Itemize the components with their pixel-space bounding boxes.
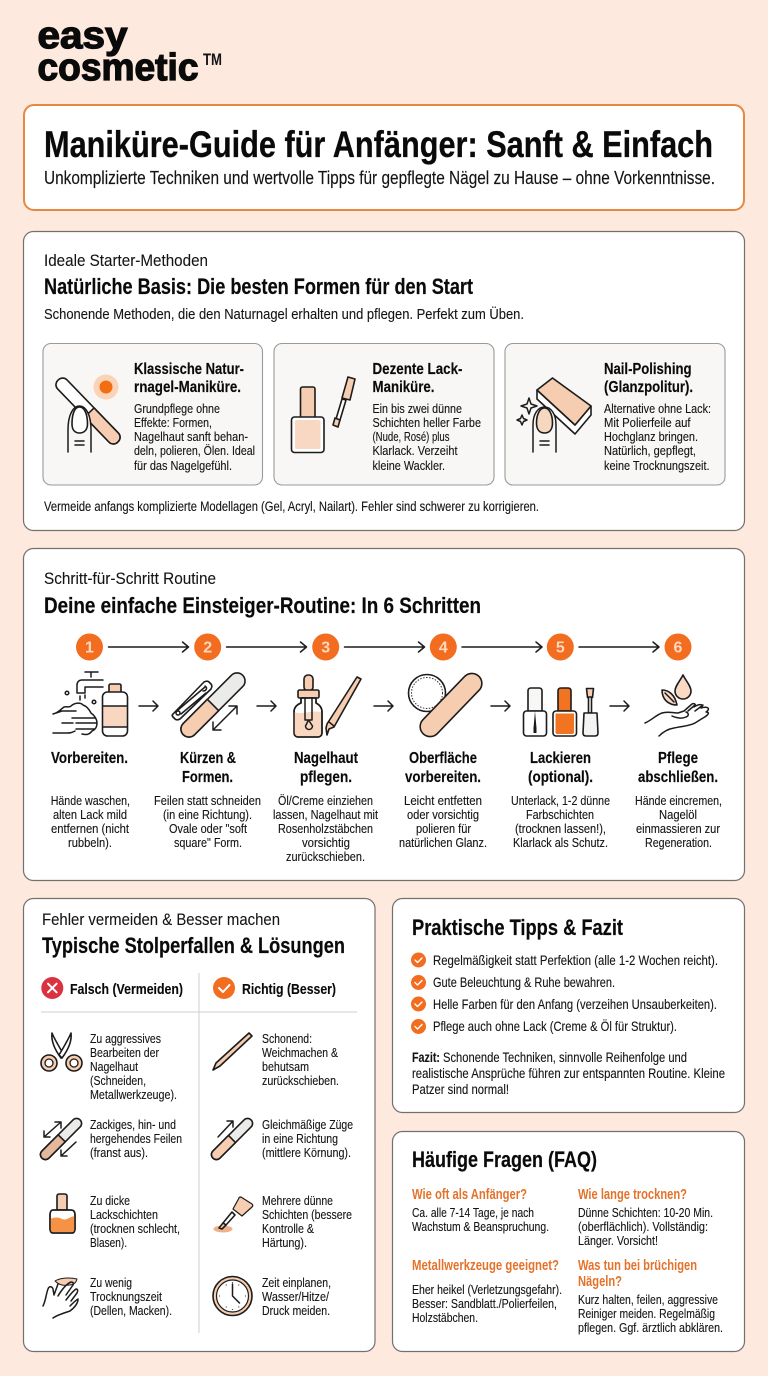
faq: brittle nails: Nägeln? bbox=[578, 1274, 622, 1290]
text: thick layers bbox=[90, 1193, 180, 1250]
text: plan time: Druck meiden. bbox=[262, 1303, 330, 1318]
icon: brush applying thin layer bbox=[214, 1197, 253, 1232]
step number timeline bbox=[76, 634, 692, 660]
faq: brittle nails: Was tun bei brüchigen bbox=[578, 1258, 697, 1274]
faq: metal tools bbox=[412, 1258, 562, 1325]
faq: how often: Ca. alle 7-14 Tage, je nach bbox=[412, 1205, 534, 1220]
icon: thick polish bottle bbox=[50, 1194, 75, 1233]
step 1 text: entfernen (nicht bbox=[51, 821, 129, 836]
text: aggressive cuticle: (Schneiden, bbox=[90, 1073, 146, 1088]
title panel bbox=[24, 105, 744, 210]
card title bbox=[604, 361, 693, 396]
column head: right: Richtig (Besser) bbox=[242, 981, 336, 998]
step 6 text: Regeneration. bbox=[645, 835, 712, 850]
step 6 text bbox=[635, 750, 722, 850]
text: plan time: Wasser/Hitze/ bbox=[262, 1289, 329, 1304]
step 5 text: Farbschichten bbox=[526, 807, 594, 822]
faq: how often: Wachstum & Beanspruchung. bbox=[412, 1219, 549, 1234]
faq: metal tools: Metallwerkzeuge geeignet? bbox=[412, 1258, 559, 1274]
conclusion: Fazit: bbox=[412, 1050, 440, 1065]
card title bbox=[372, 361, 462, 396]
step 3 text: zurückschieben. bbox=[286, 849, 365, 864]
card text: deln, polieren, Ölen. Ideal bbox=[134, 443, 255, 458]
column head: right bbox=[213, 977, 336, 999]
section heading: Typische Stolperfallen & Lösungen bbox=[42, 933, 345, 958]
icon: nail file and finger bbox=[53, 374, 123, 452]
card title: Maniküre. bbox=[372, 379, 434, 396]
faq: drying time: (oberflächlich). Vollständig: bbox=[578, 1219, 708, 1234]
icon: cuticle oil and stick bbox=[293, 675, 361, 737]
step 3 text: lassen, Nagelhaut mit bbox=[273, 807, 378, 822]
icon: cuticle stick bbox=[213, 1033, 252, 1070]
text: even strokes: in eine Richtung bbox=[262, 1131, 338, 1146]
step number timeline: 6 bbox=[674, 640, 683, 656]
step 2 text: (in eine Richtung). bbox=[163, 807, 252, 822]
faq: drying time bbox=[578, 1187, 713, 1248]
card text: keine Trocknungszeit. bbox=[604, 458, 710, 473]
card text: Effekte: Formen, bbox=[134, 415, 212, 430]
icon: hand with oil drop and leaf bbox=[645, 675, 708, 736]
section label: Ideale Starter-Methoden bbox=[44, 251, 208, 270]
step 3 text: Nagelhaut bbox=[294, 750, 359, 767]
step arrow bbox=[139, 701, 158, 711]
step 5 text: Unterlack, 1-2 dünne bbox=[511, 793, 610, 808]
card text bbox=[134, 401, 255, 473]
step 4 text bbox=[399, 750, 487, 850]
heading: Praktische Tipps & Fazit bbox=[412, 915, 623, 940]
card: subtle polish bbox=[274, 344, 494, 485]
column head: wrong: Falsch (Vermeiden) bbox=[70, 981, 183, 998]
icon: hand with smudged nail bbox=[43, 1278, 78, 1318]
step 1 text: rubbeln). bbox=[68, 835, 112, 850]
card text: Klarlack. Verzeiht bbox=[372, 443, 458, 458]
step 2 text: Ovale oder "soft bbox=[169, 821, 247, 836]
step number timeline: 4 bbox=[439, 640, 448, 656]
text: sawing filing: Zackiges, hin- und bbox=[90, 1117, 176, 1132]
faq: drying time: Wie lange trocknen? bbox=[578, 1187, 687, 1203]
faq: drying time: Länger. Vorsicht! bbox=[578, 1233, 658, 1248]
text: sawing filing bbox=[90, 1117, 182, 1160]
card text: (Nude, Rosé) plus bbox=[372, 429, 450, 444]
heading: Häufige Fragen (FAQ) bbox=[412, 1147, 597, 1172]
faq: brittle nails: Reiniger meiden. Regelmäßig bbox=[578, 1306, 715, 1321]
text: too little drying time: Trocknungszeit bbox=[90, 1289, 162, 1304]
faq: brittle nails: Kurz halten, feilen, aggressive bbox=[578, 1292, 718, 1307]
icon: clipper and nail file bbox=[172, 670, 248, 740]
step 4 text: polieren für bbox=[416, 821, 472, 836]
card title: Nail-Polishing bbox=[604, 361, 692, 378]
panel: practical tips bbox=[392, 898, 744, 1112]
step 5 text: Klarlack als Schutz. bbox=[513, 835, 608, 850]
step number timeline: 3 bbox=[321, 640, 330, 656]
step 1 text: Hände waschen, bbox=[51, 793, 130, 808]
step 4 text: natürlichen Glanz. bbox=[399, 835, 487, 850]
text: thin layers: Härtung). bbox=[262, 1235, 307, 1250]
card text: kleine Wackler. bbox=[372, 458, 445, 473]
icon: polish bottles bbox=[524, 688, 598, 736]
faq: metal tools: Holzstäbchen. bbox=[412, 1310, 478, 1325]
step 3 text bbox=[273, 750, 378, 864]
card text: Nagelhaut sanft behan- bbox=[134, 429, 248, 444]
text: aggressive cuticle: Metallwerkzeuge). bbox=[90, 1087, 177, 1102]
step 6 text: Nagelöl bbox=[659, 807, 697, 822]
card title bbox=[134, 361, 244, 396]
step number timeline: 1 bbox=[85, 640, 94, 656]
text: too little drying time bbox=[90, 1275, 172, 1318]
card text: Alternative ohne Lack: bbox=[604, 401, 711, 416]
faq: drying time: Dünne Schichten: 10-20 Min. bbox=[578, 1205, 713, 1220]
text: plan time: Zeit einplanen, bbox=[262, 1275, 331, 1290]
conclusion: Schonende Techniken, sinnvolle Reihenfolge und bbox=[443, 1050, 687, 1065]
step 2 text: Formen. bbox=[182, 769, 233, 786]
text: sawing filing: hergehendes Feilen bbox=[90, 1131, 182, 1146]
icon: washing hands bbox=[53, 672, 128, 736]
card text: Ein bis zwei dünne bbox=[372, 401, 462, 416]
logo bbox=[38, 15, 222, 89]
logo: cosmetic bbox=[38, 47, 198, 89]
text: gentle: Weichmachen & bbox=[262, 1045, 338, 1060]
text: too little drying time: Zu wenig bbox=[90, 1275, 132, 1290]
text: sawing filing: (franst aus). bbox=[90, 1145, 148, 1160]
text: gentle: zurückschieben. bbox=[262, 1073, 339, 1088]
text: plan time bbox=[262, 1275, 331, 1318]
text: aggressive cuticle: Bearbeiten der bbox=[90, 1045, 160, 1060]
icon: polish bottle and brush bbox=[292, 377, 355, 452]
step 3 text: vorsichtig bbox=[302, 835, 350, 850]
icon: one direction file bbox=[209, 1116, 255, 1162]
text: aggressive cuticle bbox=[90, 1031, 177, 1102]
faq: brittle nails bbox=[578, 1258, 723, 1335]
step number timeline: 2 bbox=[203, 640, 212, 656]
faq: metal tools: Besser: Sandblatt./Polierfeilen, bbox=[412, 1296, 557, 1311]
step 1 text: Vorbereiten. bbox=[51, 750, 128, 767]
text: thick layers: Lackschichten bbox=[90, 1207, 158, 1222]
card: classic manicure bbox=[43, 344, 262, 485]
step 4 text: Oberfläche bbox=[409, 750, 477, 767]
text: even strokes bbox=[262, 1117, 353, 1160]
text: even strokes: Gleichmäßige Züge bbox=[262, 1117, 353, 1132]
tip list: Gute Beleuchtung & Ruhe bewahren. bbox=[433, 974, 615, 990]
panel: common mistakes bbox=[24, 898, 375, 1352]
faq: metal tools: Eher heikel (Verletzungsgefahr). bbox=[412, 1282, 562, 1297]
text: gentle: behutsam bbox=[262, 1059, 309, 1074]
step 4 text: oder vorsichtig bbox=[407, 807, 479, 822]
card title: (Glanzpolitur). bbox=[604, 379, 693, 396]
step 6 text: Hände eincremen, bbox=[635, 793, 722, 808]
text: aggressive cuticle: Zu aggressives bbox=[90, 1031, 161, 1046]
logo: easy bbox=[38, 15, 127, 57]
step 3 text: pflegen. bbox=[300, 769, 352, 786]
text: thin layers: Schichten (bessere bbox=[262, 1207, 352, 1222]
step arrow bbox=[257, 701, 276, 711]
step 2 text: square" Form. bbox=[174, 835, 242, 850]
step 5 text bbox=[511, 750, 610, 850]
section heading: Deine einfache Einsteiger-Routine: In 6 Schritten bbox=[44, 593, 481, 618]
card title: Klassische Natur- bbox=[134, 361, 244, 378]
step 6 text: einmassieren zur bbox=[636, 821, 721, 836]
section label: Schritt-für-Schritt Routine bbox=[44, 569, 216, 588]
text: thin layers: Mehrere dünne bbox=[262, 1193, 333, 1208]
panel: FAQ bbox=[392, 1132, 744, 1352]
card title: rnagel-Maniküre. bbox=[134, 379, 241, 396]
text: thick layers: (trocknen schlecht, bbox=[90, 1221, 180, 1236]
section label: Fehler vermeiden & Besser machen bbox=[42, 910, 280, 929]
tip list bbox=[411, 952, 718, 1034]
table dividers bbox=[41, 973, 357, 1333]
faq: brittle nails: pflegen. Ggf. ärztlich abklären. bbox=[578, 1320, 723, 1335]
step 4 text: vorbereiten. bbox=[405, 769, 481, 786]
panel: starter methods bbox=[24, 232, 744, 530]
step arrow bbox=[374, 701, 393, 711]
step 3 text: Rosenholzstäbchen bbox=[278, 821, 373, 836]
step arrow bbox=[610, 701, 629, 711]
card text bbox=[372, 401, 481, 473]
icon: cotton pad and buffer bbox=[408, 669, 486, 741]
step 6 text: Pflege bbox=[658, 750, 698, 767]
text: too little drying time: (Dellen, Macken). bbox=[90, 1303, 172, 1318]
warning note: Vermeide anfangs komplizierte Modellagen (Gel, Acryl, Nailart). Fehler sind schwerer zu korrigieren. bbox=[44, 499, 539, 514]
card text: für das Nagelgefühl. bbox=[134, 458, 232, 473]
step 5 text: Lackieren bbox=[530, 750, 591, 767]
step number timeline: 5 bbox=[556, 640, 565, 656]
conclusion: Patzer sind normal! bbox=[412, 1082, 509, 1097]
panel: step by step routine bbox=[24, 548, 744, 880]
text: aggressive cuticle: Nagelhaut bbox=[90, 1059, 138, 1074]
card text: Mit Polierfeile auf bbox=[604, 415, 691, 430]
icon: buffer block and finger bbox=[517, 378, 591, 452]
icon: clock bbox=[213, 1276, 252, 1316]
step 2 text: Kürzen & bbox=[180, 750, 236, 767]
faq: how often bbox=[412, 1187, 549, 1234]
card text: Natürlich, gepflegt, bbox=[604, 443, 696, 458]
card title: Dezente Lack- bbox=[372, 361, 462, 378]
icon: sawing file bbox=[38, 1116, 84, 1162]
step 1 text: alten Lack mild bbox=[53, 807, 127, 822]
tip list: Pflege auch ohne Lack (Creme & Öl für Struktur). bbox=[433, 1017, 677, 1034]
text: even strokes: (mittlere Körnung). bbox=[262, 1145, 351, 1160]
section heading: Natürliche Basis: Die besten Formen für den Start bbox=[44, 274, 473, 299]
step 2 text bbox=[154, 750, 261, 850]
text: thick layers: Blasen). bbox=[90, 1235, 127, 1250]
step 3 text: Öl/Creme einziehen bbox=[278, 793, 373, 808]
conclusion bbox=[412, 1050, 725, 1097]
icon: scissors bbox=[41, 1033, 82, 1071]
step 6 text: abschließen. bbox=[638, 769, 718, 786]
card text: Hochglanz bringen. bbox=[604, 429, 698, 444]
card text bbox=[604, 401, 711, 473]
step 2 text: Feilen statt schneiden bbox=[154, 793, 261, 808]
step 5 text: (optional). bbox=[528, 769, 593, 786]
step 1 text bbox=[51, 750, 130, 850]
text: thick layers: Zu dicke bbox=[90, 1193, 130, 1208]
faq: how often: Wie oft als Anfänger? bbox=[412, 1187, 527, 1203]
card text: Grundpflege ohne bbox=[134, 401, 220, 416]
text: gentle bbox=[262, 1031, 339, 1088]
card text: Schichten heller Farbe bbox=[372, 415, 481, 430]
column head: wrong bbox=[41, 977, 183, 999]
step arrow bbox=[491, 701, 510, 711]
text: thin layers: Kontrolle & bbox=[262, 1221, 314, 1236]
section description: Schonende Methoden, die den Naturnagel erhalten und pflegen. Perfekt zum Üben. bbox=[44, 305, 524, 323]
logo: TM bbox=[203, 50, 222, 69]
text: gentle: Schonend: bbox=[262, 1031, 312, 1046]
text: thin layers bbox=[262, 1193, 352, 1250]
step 4 text: Leicht entfetten bbox=[404, 793, 482, 808]
step 5 text: (trocknen lassen!), bbox=[515, 821, 606, 836]
card: nail polishing bbox=[505, 344, 725, 485]
